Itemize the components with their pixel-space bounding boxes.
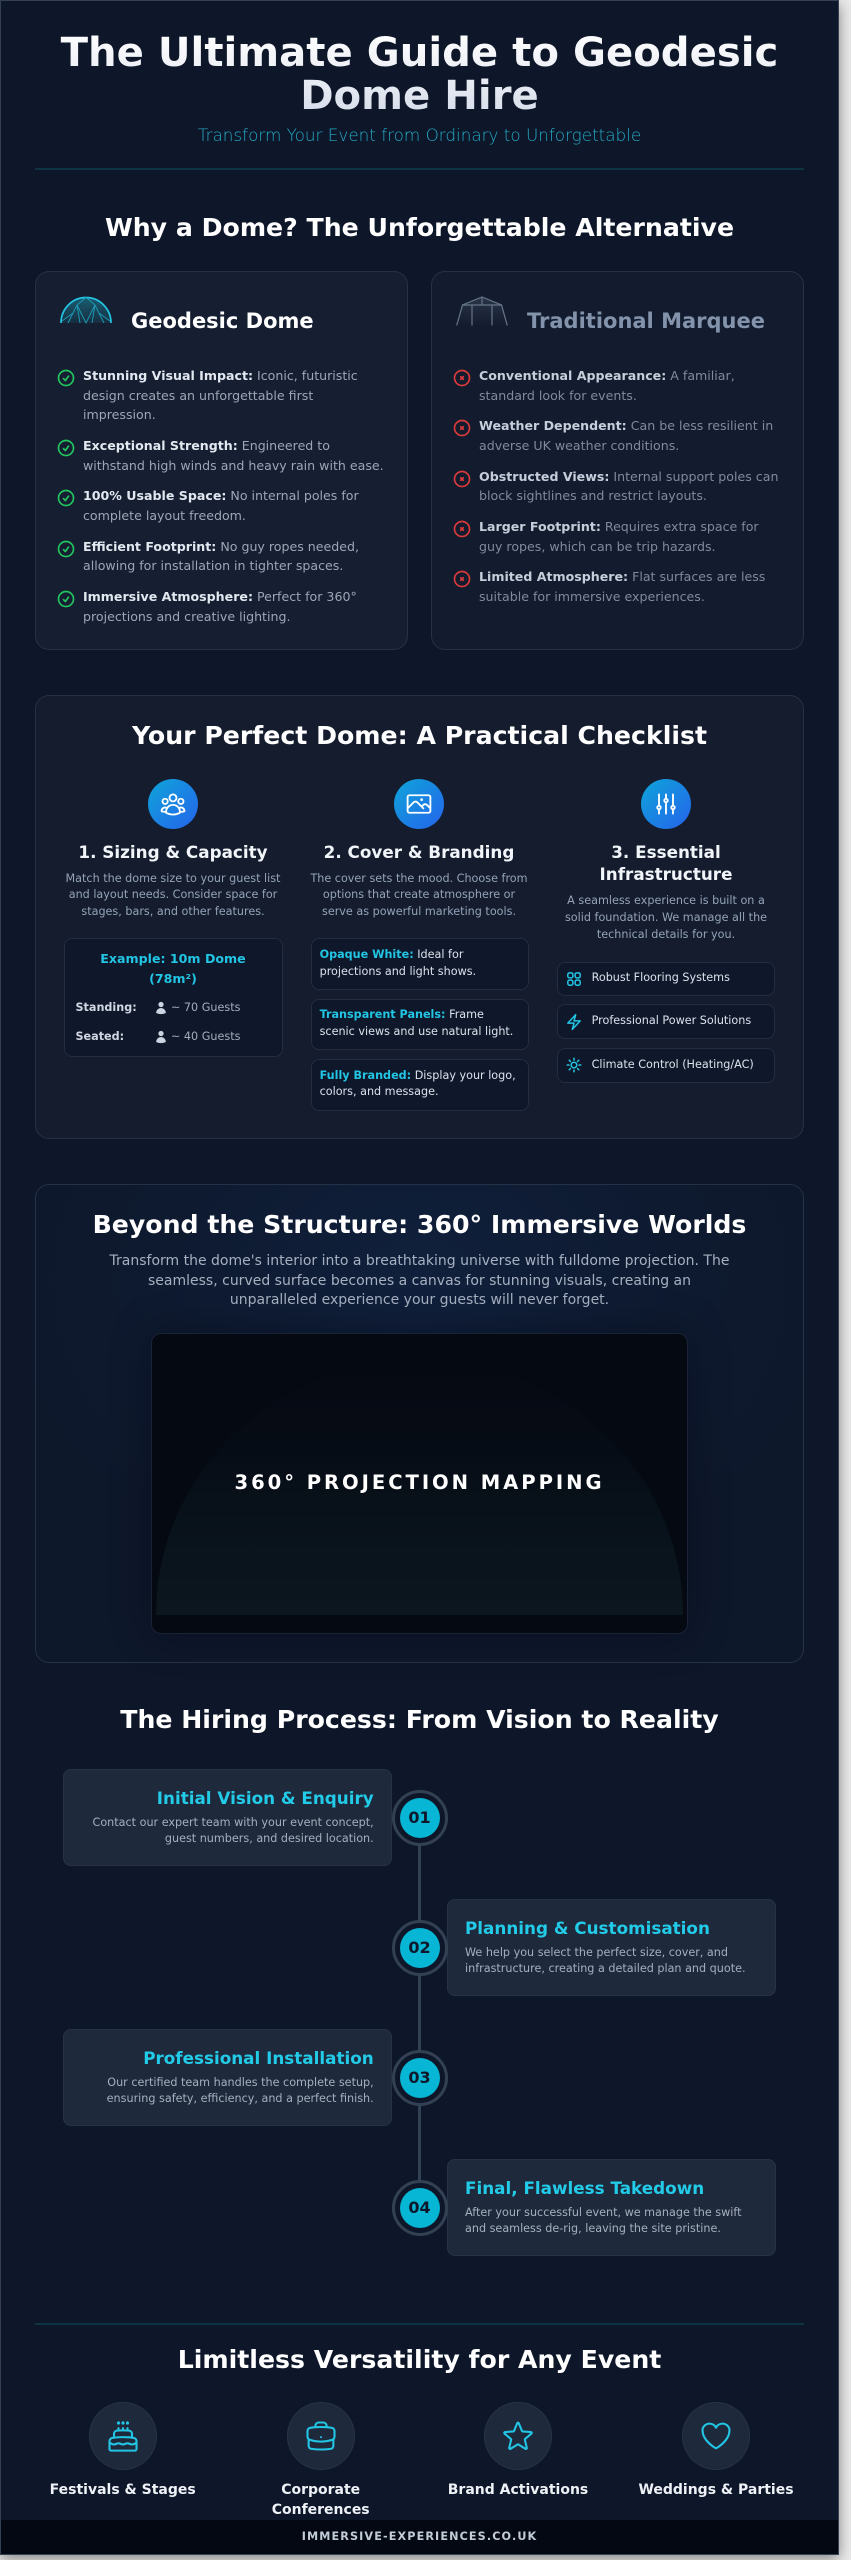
footer bar: IMMERSIVE-EXPERIENCES.CO.UK — [302, 2530, 537, 2543]
item: flooring: Robust Flooring Systems — [592, 971, 730, 984]
step 2 card — [447, 1899, 776, 1996]
example title: (78m²) — [149, 971, 197, 986]
option: opaque white — [311, 938, 529, 990]
use case: corporate — [272, 2402, 370, 2518]
panel: geodesic dome — [35, 271, 408, 650]
option: fully branded — [311, 1059, 529, 1111]
column description — [565, 894, 767, 941]
use case: brand activations — [448, 2402, 588, 2498]
step 4 card — [447, 2159, 776, 2256]
option: transparent panels: Transparent Panels: Frame — [320, 1008, 484, 1021]
drawback 1: Conventional Appearance: A familiar, — [479, 368, 735, 383]
step 2 number: 02 — [408, 1938, 431, 1957]
column description: serve as powerful marketing tools. — [322, 905, 516, 918]
title: Dome Hire — [300, 73, 539, 119]
column: sizing and capacity — [64, 779, 283, 1057]
benefit 2 — [58, 438, 384, 473]
infographic page: Festivals & Stages — [50, 2482, 196, 2498]
step 1 card: guest numbers, and desired location. — [165, 1832, 374, 1845]
benefit 1: Stunning Visual Impact: Iconic, futuristic — [83, 368, 358, 383]
paragraph: immersive — [109, 1253, 729, 1308]
benefit 3: 100% Usable Space: No internal poles for — [83, 488, 359, 503]
standing capacity: Standing: — [76, 1001, 137, 1014]
column description: options that create atmosphere or — [323, 888, 515, 901]
seated capacity — [76, 1030, 240, 1044]
dome glow — [156, 1360, 683, 1615]
seated capacity: Seated: — [76, 1030, 124, 1043]
column description — [310, 872, 528, 918]
heading: immersive: Beyond the Structure: 360° Immersive Worlds — [93, 1210, 746, 1239]
panel: immersive worlds — [35, 1184, 804, 1663]
drawback 5: suitable for immersive experiences. — [479, 589, 705, 604]
step 3 card: Our certified team handles the complete setup, — [107, 2076, 374, 2089]
column description: A seamless experience is built on a — [567, 894, 765, 907]
step 1 card — [63, 1769, 392, 1866]
drawback 2: adverse UK weather conditions. — [479, 438, 679, 453]
option: transparent panels: scenic views and use natural light. — [320, 1025, 513, 1038]
step 4 card: After your successful event, we manage the swift — [465, 2206, 742, 2219]
column title: 2. Cover & Branding — [324, 842, 514, 862]
step 4 card: and seamless de-rig, leaving the site pristine. — [465, 2222, 721, 2235]
infographic page: Weddings & Parties — [638, 2482, 794, 2498]
step 3 card: ensuring safety, efficiency, and a perfect finish. — [107, 2092, 374, 2105]
benefit 5 — [58, 589, 357, 624]
benefit 1: design creates an unforgettable first — [83, 388, 313, 403]
step 1 number: 01 — [408, 1808, 431, 1827]
title — [0, 32, 839, 118]
footer bar — [1, 2520, 838, 2554]
drawback 4: Larger Footprint: Requires extra space for — [479, 519, 759, 534]
column title — [600, 842, 732, 884]
example capacity box — [64, 938, 282, 1057]
title: The Ultimate Guide to Geodesic — [61, 30, 778, 76]
step 3 card: Professional Installation — [143, 2048, 374, 2068]
drawback 2: Weather Dependent: Can be less resilient in — [479, 418, 773, 433]
step 1 card: Contact our expert team with your event concept, — [93, 1816, 374, 1829]
heading: traditional marquee: Traditional Marquee — [527, 309, 765, 333]
benefit 2: Exceptional Strength: Engineered to — [83, 438, 330, 453]
infographic page: Conferences — [272, 2502, 370, 2518]
column description: Match the dome size to your guest list — [66, 872, 280, 885]
benefit 4: allowing for installation in tighter spaces. — [83, 558, 343, 573]
option: opaque white: projections and light shows. — [320, 965, 476, 978]
column description: stages, bars, and other features. — [81, 905, 265, 918]
benefit 1 — [58, 368, 358, 422]
infographic page: Corporate — [281, 2482, 360, 2498]
step 2 card: Planning & Customisation — [465, 1918, 710, 1938]
icon: group of people — [148, 779, 198, 829]
item: climate — [557, 1048, 775, 1083]
example title — [100, 951, 246, 986]
step 1 card: Initial Vision & Enquiry — [157, 1788, 374, 1808]
benefit 1: impression. — [83, 407, 156, 422]
step 4 number: 04 — [408, 2198, 431, 2217]
column description: The cover sets the mood. Choose from — [310, 872, 528, 885]
column title: 1. Sizing & Capacity — [78, 842, 268, 862]
benefit 2: withstand high winds and heavy rain with ease. — [83, 458, 384, 473]
drawback 4: guy ropes, which can be trip hazards. — [479, 539, 716, 554]
heading: why a dome: Why a Dome? The Unforgettable Alternative — [105, 213, 734, 242]
column title: Infrastructure — [600, 864, 732, 884]
standing capacity: ~ 70 Guests — [171, 1001, 240, 1014]
icon: marquee — [456, 296, 508, 326]
column title: 3. Essential — [611, 842, 721, 862]
panel: practical checklist — [35, 695, 804, 1139]
step 3 number: 03 — [408, 2068, 431, 2087]
option: transparent panels — [311, 999, 529, 1050]
drawback 3 — [454, 469, 778, 503]
step 4 card: Final, Flawless Takedown — [465, 2178, 704, 2198]
column: essential infrastructure — [557, 779, 775, 1083]
icon: sliders — [641, 779, 691, 829]
item: power — [557, 1004, 775, 1039]
step 2 card: infrastructure, creating a detailed plan and quote. — [465, 1962, 746, 1975]
step 3 card — [63, 2029, 392, 2126]
drawback 5: Limited Atmosphere: Flat surfaces are less — [479, 569, 765, 584]
step 1 number — [392, 1790, 448, 1846]
benefit 3: complete layout freedom. — [83, 508, 246, 523]
heading: hiring process: The Hiring Process: From Vision to Reality — [120, 1705, 719, 1734]
icon: image — [394, 779, 444, 829]
infographic page: Brand Activations — [448, 2482, 588, 2498]
projection label: 360° PROJECTION MAPPING — [234, 1471, 604, 1494]
benefit 4: Efficient Footprint: No guy ropes needed, — [83, 539, 359, 554]
example title: Example: 10m Dome — [100, 951, 246, 966]
standing capacity — [76, 1001, 240, 1014]
column description: and layout needs. Consider space for — [69, 888, 277, 901]
option: opaque white: Opaque White: Ideal for — [320, 948, 463, 961]
heading: checklist: Your Perfect Dome: A Practical Checklist — [132, 721, 707, 750]
column description — [66, 872, 280, 918]
step 2 number — [392, 1920, 448, 1976]
step 2 card: We help you select the perfect size, cover, and — [465, 1946, 728, 1959]
projection mapping visual — [151, 1333, 688, 1634]
column description: solid foundation. We manage all the — [565, 911, 767, 924]
heading: geodesic dome: Geodesic Dome — [131, 309, 314, 333]
drawback 5 — [454, 569, 765, 604]
drawback 3: Obstructed Views: Internal support poles can — [479, 469, 778, 484]
option: fully branded: Fully Branded: Display your logo, — [320, 1069, 516, 1082]
use case: weddings — [638, 2402, 794, 2498]
use case: festivals — [50, 2402, 196, 2498]
drawback 1 — [454, 368, 735, 403]
drawback 3: block sightlines and restrict layouts. — [479, 488, 707, 503]
item: climate: Climate Control (Heating/AC) — [592, 1058, 754, 1071]
timeline: hiring process — [63, 1769, 776, 2256]
panel: traditional marquee — [431, 271, 804, 650]
paragraph: immersive: Transform the dome's interior into a breathtaking universe with fulldome projection. The — [110, 1253, 729, 1269]
paragraph: immersive: unparalleled experience your guests will never forget. — [230, 1292, 609, 1308]
step 4 number — [392, 2180, 448, 2236]
heading: versatility: Limitless Versatility for Any Event — [178, 2345, 661, 2374]
subtitle: Transform Your Event from Ordinary to Unforgettable — [198, 125, 641, 145]
icon: geodesic dome — [60, 296, 112, 324]
item: flooring — [557, 962, 775, 996]
item: power: Professional Power Solutions — [592, 1014, 751, 1027]
benefit 4 — [58, 539, 359, 573]
step 3 number — [392, 2050, 448, 2106]
column description: technical details for you. — [597, 928, 735, 941]
benefit 3 — [58, 488, 359, 523]
seated capacity: ~ 40 Guests — [171, 1030, 240, 1043]
benefit 5: Immersive Atmosphere: Perfect for 360° — [83, 589, 357, 604]
paragraph: immersive: seamless, curved surface becomes a canvas for stunning visuals, creating an — [148, 1273, 691, 1289]
drawback 1: standard look for events. — [479, 388, 637, 403]
drawback 2 — [454, 418, 773, 453]
option: fully branded: colors, and message. — [320, 1085, 439, 1098]
benefit 5: projections and creative lighting. — [83, 609, 290, 624]
column: cover and branding — [310, 779, 529, 1111]
drawback 4 — [454, 519, 759, 554]
